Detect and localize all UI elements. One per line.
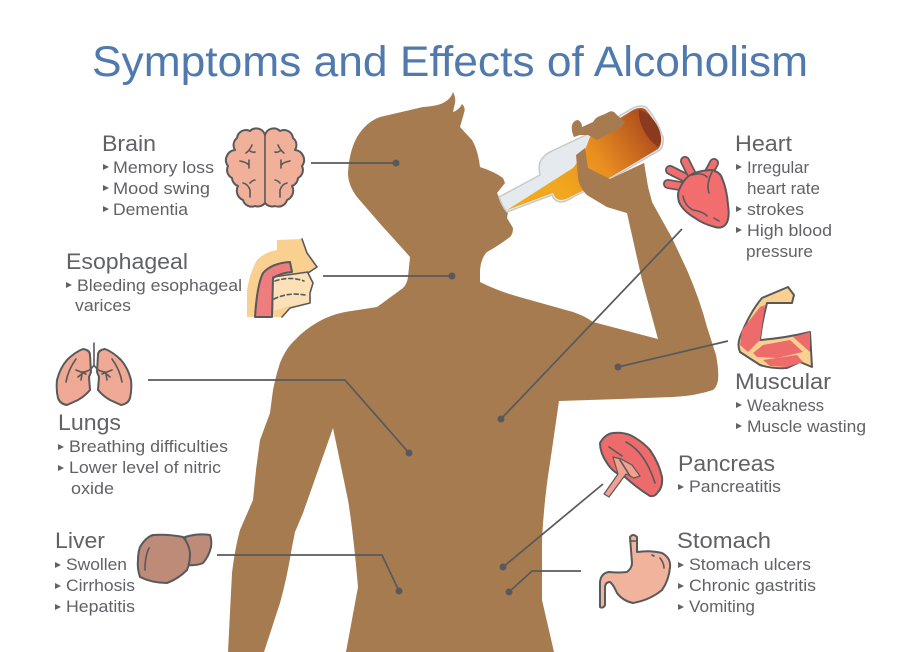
brain leader xyxy=(311,160,400,166)
icon: esophagus xyxy=(247,239,317,317)
panel: heart text xyxy=(735,131,832,261)
symptom list: Dementia xyxy=(113,201,189,219)
panel: brain text xyxy=(102,131,214,219)
hand holding bottle xyxy=(576,148,652,225)
symptom list: Hepatitis xyxy=(66,598,135,616)
symptom list xyxy=(55,556,135,616)
panel: pancreas text xyxy=(678,451,781,496)
bottle glass xyxy=(499,106,663,212)
symptom list: Weakness xyxy=(747,397,824,415)
symptom list: Pancreatitis xyxy=(689,478,781,496)
heading: Pancreas xyxy=(678,451,775,476)
panel: esophageal text xyxy=(66,249,242,315)
symptom list: oxide xyxy=(71,480,114,498)
liver leader xyxy=(217,555,402,594)
symptom list: Cirrhosis xyxy=(66,577,135,595)
lungs leader xyxy=(148,380,412,456)
title: Symptoms and Effects of Alcoholism xyxy=(92,38,808,86)
stomach leader xyxy=(506,571,581,596)
icon: pancreas xyxy=(600,433,662,497)
symptom list: Breathing difficulties xyxy=(69,438,228,456)
symptom list: pressure xyxy=(746,243,813,261)
panel: liver text xyxy=(55,528,135,616)
pancreas leader xyxy=(500,484,603,570)
symptom list: heart rate xyxy=(747,180,820,198)
panel: lungs text xyxy=(58,410,228,498)
heading: Lungs xyxy=(58,410,121,435)
heading: Esophageal xyxy=(66,249,188,274)
symptom list xyxy=(103,159,214,219)
symptom list xyxy=(736,159,832,261)
symptom list xyxy=(66,277,242,315)
heading: Brain xyxy=(102,131,156,156)
symptom list xyxy=(678,556,816,616)
symptom list: Chronic gastritis xyxy=(689,577,816,595)
heading: Liver xyxy=(55,528,106,553)
symptom list xyxy=(58,438,228,498)
symptom list: Muscle wasting xyxy=(747,418,866,436)
symptom list: Lower level of nitric xyxy=(69,459,221,477)
symptom list: Memory loss xyxy=(113,159,214,177)
symptom list: Bleeding esophageal xyxy=(77,277,242,295)
body silhouette xyxy=(228,92,718,652)
leader lines xyxy=(148,160,728,596)
heading: Muscular xyxy=(735,369,832,394)
symptom list: Stomach ulcers xyxy=(689,556,811,574)
icon: stomach xyxy=(600,535,670,608)
symptom list: Irregular xyxy=(747,159,809,177)
symptom list: Swollen xyxy=(66,556,127,574)
panel: muscular text xyxy=(735,369,866,436)
beer bottle xyxy=(499,106,663,212)
icon: liver xyxy=(138,534,211,583)
symptom list xyxy=(736,397,866,436)
symptom list: Mood swing xyxy=(113,180,210,198)
icon: heart xyxy=(668,161,729,228)
symptom list: High blood xyxy=(747,222,832,240)
symptom list: varices xyxy=(75,297,131,315)
heading: Heart xyxy=(735,131,793,156)
panel: stomach text xyxy=(677,528,816,616)
icon: flexed arm muscle xyxy=(738,287,812,368)
icon: lungs xyxy=(57,343,131,405)
bottle base xyxy=(639,110,661,147)
hand fingers xyxy=(572,111,625,140)
symptom list: Vomiting xyxy=(689,598,755,616)
esophageal leader xyxy=(323,272,456,280)
symptom list: strokes xyxy=(747,201,804,219)
beer xyxy=(507,108,661,210)
muscular leader xyxy=(614,341,728,370)
heart leader xyxy=(498,229,682,422)
heading: Stomach xyxy=(677,528,771,553)
icon: brain xyxy=(226,128,304,207)
